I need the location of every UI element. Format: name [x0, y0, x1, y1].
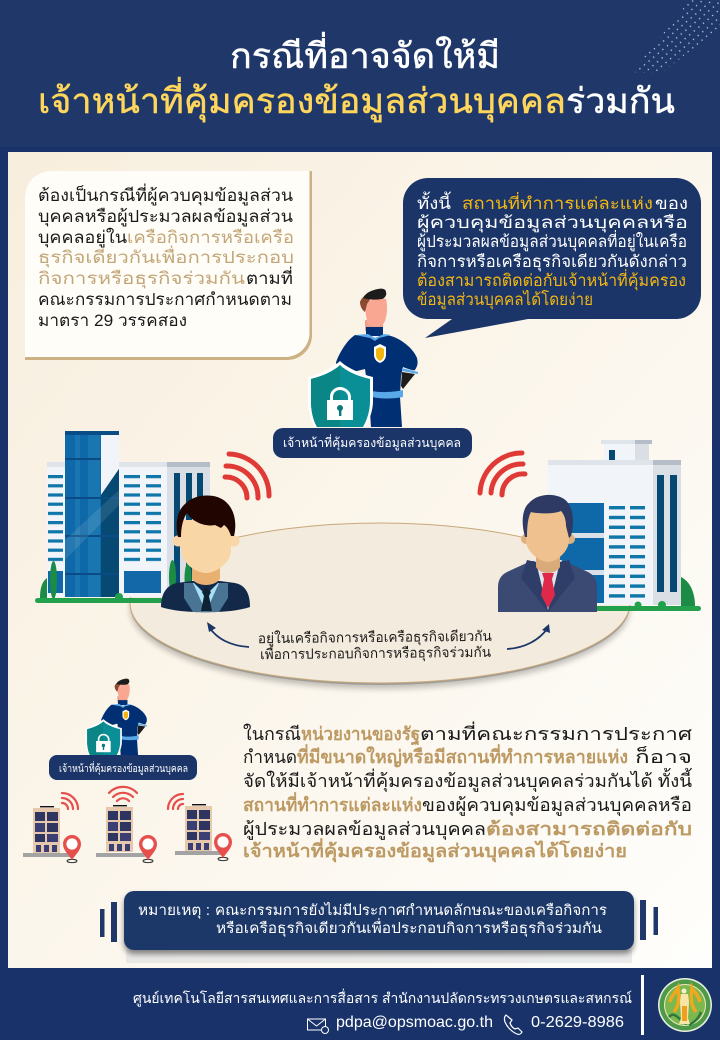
footer email: pdpa@opsmoac.go.th — [336, 1014, 493, 1031]
small building 1 with pin — [23, 793, 81, 863]
note reflection — [126, 950, 632, 963]
note box: หมายเหตุ : — [138, 903, 210, 919]
arrow: right — [507, 624, 550, 649]
footer phone: 0-2629-8986 — [531, 1014, 624, 1031]
main paragraph: ก็อาจ — [635, 745, 692, 767]
speech bubble — [403, 178, 701, 338]
title: เจ้าหน้าที่คุ้มครองข้อมูลส่วนบุคคล — [38, 77, 566, 122]
note box — [124, 891, 634, 950]
speech bubble: ผู้ประมวลผลข้อมูลส่วนบุคคลที่อยู่ในเครือ — [417, 230, 687, 252]
panel: left text card: มาตรา 29 วรรคสอง — [38, 311, 187, 330]
panel: left text card: บุคคลอยู่ใน — [38, 227, 127, 248]
note box: หรือเครือธุรกิจเดียวกันเพื่อประกอบกิจการหรือธุรกิจร่วมกัน — [216, 918, 602, 937]
main paragraph: ในกรณี — [243, 723, 301, 744]
speech bubble: ของ — [655, 195, 688, 213]
main cream panel — [8, 152, 712, 968]
panel: left text card: คณะกรรมการประกาศกำหนดตาม — [38, 290, 292, 309]
small building 3 with pin — [168, 794, 232, 861]
header band — [0, 0, 720, 147]
small building 2 with pin — [96, 787, 157, 863]
note box: คณะกรรมการยังไม่มีประกาศกำหนดลักษณะของเครือกิจการ — [215, 901, 607, 919]
main paragraph — [243, 721, 693, 863]
dotted decoration — [632, 0, 720, 74]
small officer label pill: เจ้าหน้าที่คุ้มครองข้อมูลส่วนบุคคล — [59, 761, 188, 775]
speech bubble: กิจการหรือเครือธุรกิจเดียวกันดังกล่าว — [417, 253, 687, 272]
speech bubble: ทั้งนี้ — [417, 191, 451, 213]
title: ร่วมกัน — [566, 82, 675, 121]
officer label pill: เจ้าหน้าที่คุ้มครองข้อมูลส่วนบุคคล — [283, 434, 461, 451]
main paragraph: เจ้าหน้าที่คุ้มครองข้อมูลส่วนบุคคลได้โดยง่าย — [243, 838, 627, 863]
main paragraph: หน่วยงานของรัฐ — [301, 724, 420, 746]
panel: left text card: บุคคลหรือผู้ประมวลผลข้อมูลส่วน — [38, 207, 293, 227]
speech bubble: สถานที่ทำการแต่ละแห่ง — [462, 192, 653, 213]
icon: phone — [504, 1015, 522, 1034]
speech bubble: ผู้ควบคุมข้อมูลส่วนบุคคลหรือ — [417, 214, 688, 233]
speech bubble: ต้องสามารถติดต่อกับเจ้าหน้าที่คุ้มครอง — [417, 269, 686, 291]
right person — [498, 495, 597, 612]
footer organisation text: ศูนย์เทคโนโลยีสารสนเทศและการสื่อสาร สำนักงานปลัดกระทรวงเกษตรและสหกรณ์ — [133, 989, 632, 1007]
small officer illustration — [85, 679, 147, 756]
icon: right signal waves — [480, 453, 525, 495]
main paragraph: จัดให้มีเจ้าหน้าที่คุ้มครองข้อมูลส่วนบุคคลร่วมกันได้ ทั้งนี้ — [243, 768, 692, 792]
panel: left text card: เครือกิจการหรือเครือ — [127, 228, 294, 247]
title: กรณีที่อาจจัดให้มี — [230, 32, 500, 76]
panel: left text card: ต้องเป็นกรณีที่ผู้ควบคุมข้อมูลส่วน — [38, 183, 293, 206]
panel: left text card: กิจการหรือธุรกิจร่วมกัน — [38, 269, 245, 289]
main paragraph: ผู้ประมวลผลข้อมูลส่วนบุคคล — [243, 819, 486, 840]
footer band — [0, 968, 720, 1040]
left person — [161, 495, 250, 612]
arrow: left — [207, 622, 249, 647]
ellipse caption: เพื่อการประกอบกิจการหรือธุรกิจร่วมกัน — [260, 643, 492, 663]
officer illustration — [308, 289, 418, 427]
ellipse caption — [258, 628, 493, 663]
main paragraph: กำหนด — [243, 747, 297, 767]
panel: left text card: ตามที่ — [246, 266, 293, 288]
main paragraph: ของผู้ควบคุมข้อมูลส่วนบุคคลหรือ — [422, 795, 692, 816]
central ellipse platform — [130, 523, 630, 685]
note side bars — [100, 900, 658, 942]
panel: left text card: ธุรกิจเดียวกันเพื่อการประกอบ — [38, 245, 294, 268]
icon: email — [308, 1019, 328, 1034]
speech bubble: ข้อมูลส่วนบุคคลได้โดยง่าย — [417, 290, 593, 310]
right building — [548, 440, 701, 611]
main paragraph: ที่มีขนาดใหญ่หรือมีสถานที่ทำการหลายแห่ง — [297, 744, 628, 768]
small officer label pill — [49, 755, 197, 780]
main paragraph: ตามที่คณะกรรมการประกาศ — [420, 721, 693, 744]
footer divider — [641, 975, 644, 1035]
officer label pill — [273, 428, 472, 458]
logo — [658, 978, 712, 1032]
main paragraph: ต้องสามารถติดต่อกับ — [486, 819, 692, 839]
panel: left text card — [25, 171, 312, 360]
left building — [35, 431, 210, 603]
main paragraph: สถานที่ทำการแต่ละแห่ง — [243, 792, 422, 815]
title — [38, 32, 675, 122]
ellipse caption: อยู่ในเครือกิจการหรือเครือธุรกิจเดียวกัน — [258, 628, 492, 647]
icon: left signal waves — [225, 454, 269, 498]
